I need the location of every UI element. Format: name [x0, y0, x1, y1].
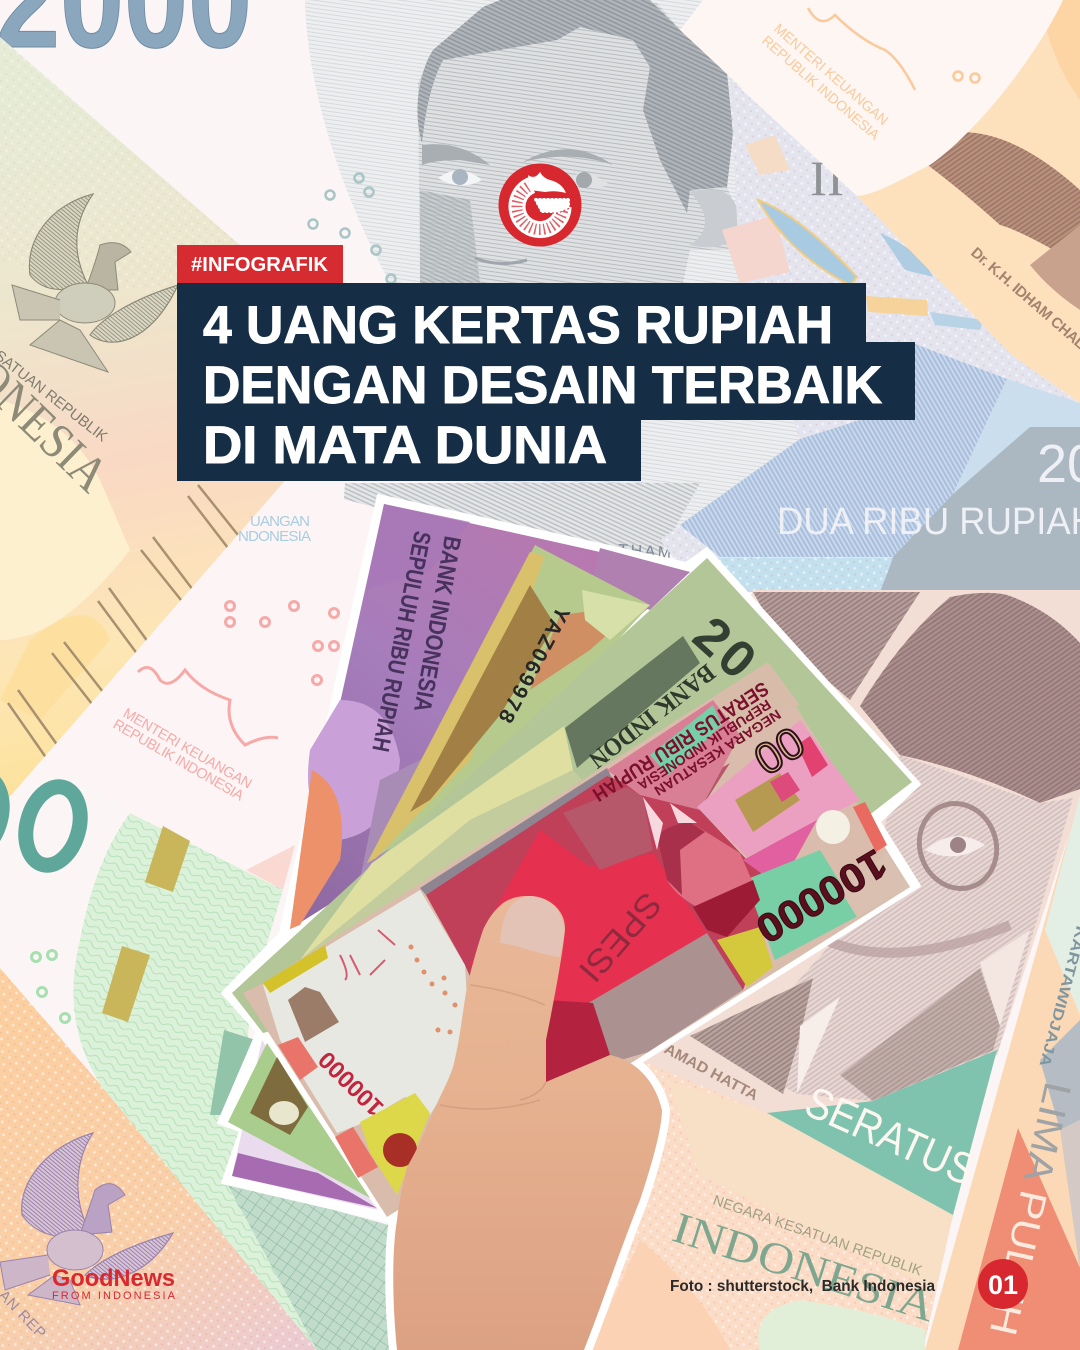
banknote: red one hundred thousand: NEGARA KESATUAN — [652, 706, 784, 799]
banknote: red one hundred thousand: 100000 — [313, 1046, 389, 1121]
title: DI MATA DUNIA — [203, 416, 607, 475]
banknote: purple ten thousand: BANK INDONESIA — [408, 534, 466, 714]
banknote: pink signature note left — [0, 483, 385, 890]
banknote: red one hundred thousand: 100000 — [748, 840, 894, 951]
icon: garuda emblem lower left — [0, 1133, 173, 1305]
banknote: large green twenty thousand: BANK INDON — [584, 658, 720, 773]
hashtag tag: #INFOGRAFIK — [191, 254, 329, 276]
page number badge: 01 — [988, 1270, 1018, 1300]
banknote: red one hundred thousand: REPUBLIK INDONESIA — [635, 696, 774, 793]
page number badge — [978, 1259, 1028, 1309]
note edge stack — [420, 768, 612, 900]
banknote: right edge strips with LIMA PULUH — [925, 795, 1080, 1350]
money fan held in hand — [218, 495, 920, 1222]
banknote: pink signature note left: NDONESIA — [238, 528, 311, 545]
banknote: right edge strips with LIMA PULUH: LIMA PULUH — [981, 1078, 1078, 1339]
hand outline — [393, 1055, 662, 1350]
banknote: purple ten thousand — [290, 504, 690, 929]
banknote: peach note bottom right — [585, 1050, 953, 1350]
hashtag tag — [177, 245, 343, 283]
banknote: pink signature note left: MENTERI KEUANGAN — [120, 706, 254, 792]
banknote: red one hundred thousand: SPESI — [571, 885, 669, 989]
banknote: pink signature note left: REPUBLIK INDONESIA — [110, 717, 246, 805]
title — [177, 283, 915, 481]
banknote: purple lower corner — [232, 1040, 378, 1210]
banknote: red one hundred thousand: 00 — [745, 717, 813, 784]
icon: big numeral 00 — [0, 770, 88, 871]
banknote: peach note bottom right: NEGARA KESATUAN REPUBLIK — [711, 1193, 924, 1280]
banknote: orange and yellow note left — [0, 37, 380, 808]
banknote: teal SERATUS band — [767, 1050, 997, 1215]
hand holding the money — [393, 896, 662, 1350]
banknote: large green twenty thousand: 20 — [682, 606, 767, 690]
banknote: large green twenty thousand — [228, 558, 912, 1198]
banknote: green-yellow serial note — [367, 545, 650, 863]
title: 4 UANG KERTAS RUPIAH — [203, 296, 833, 355]
banknote: peach note bottom right: INDONESIA — [667, 1203, 941, 1331]
logo: GoodNews from Indonesia: GoodNews — [52, 1265, 175, 1292]
banknote: blue map note: II — [810, 150, 844, 206]
photo credit: Foto : shutterstock, Bank Indonesia — [670, 1278, 935, 1295]
banknote: pink signature note left: UANGAN — [250, 513, 310, 530]
banknote: brown portrait right: AMAD HATTA — [661, 1041, 761, 1104]
hand creases — [440, 985, 546, 1109]
banknote: grey portrait top centre: THAMRIN — [618, 542, 707, 564]
banknote: red one hundred thousand — [243, 662, 910, 1217]
banknote: teal SERATUS band: SERATUS — [798, 1077, 982, 1195]
logo: red G emblem — [498, 164, 582, 246]
banknote: peach garuda note bottom left — [0, 968, 317, 1350]
banknote: orange note top right — [680, 0, 1080, 403]
banknote: orange note top right: REPUBLIK INDONESIA — [759, 32, 883, 143]
logo: GoodNews from Indonesia: FROM INDONESIA — [52, 1290, 176, 1302]
banknote: green note lower left — [0, 757, 400, 1350]
banknote: orange note top right: MENTERI KEUANGAN — [771, 20, 892, 128]
portrait hair — [418, 0, 733, 213]
fan white sticker outline — [218, 495, 920, 1222]
banknote: brown portrait right — [640, 590, 1080, 1113]
icon: thumb nail — [500, 896, 564, 957]
banknote: purple ten thousand: SEPULUH RIBU RUPIAH — [366, 529, 436, 754]
portrait face — [418, 3, 740, 283]
portrait on red note — [657, 822, 753, 907]
banknote: green-yellow serial note: YAZ069978 — [493, 603, 574, 727]
title: DENGAN DESAIN TERBAIK — [203, 356, 882, 415]
banknote: blue map note — [660, 79, 1080, 592]
banknote: grey portrait top centre — [305, 0, 800, 564]
banknote: red one hundred thousand: SERATUS RIBU RUPIAH — [588, 677, 772, 805]
icon: garuda emblem upper left — [12, 194, 178, 372]
